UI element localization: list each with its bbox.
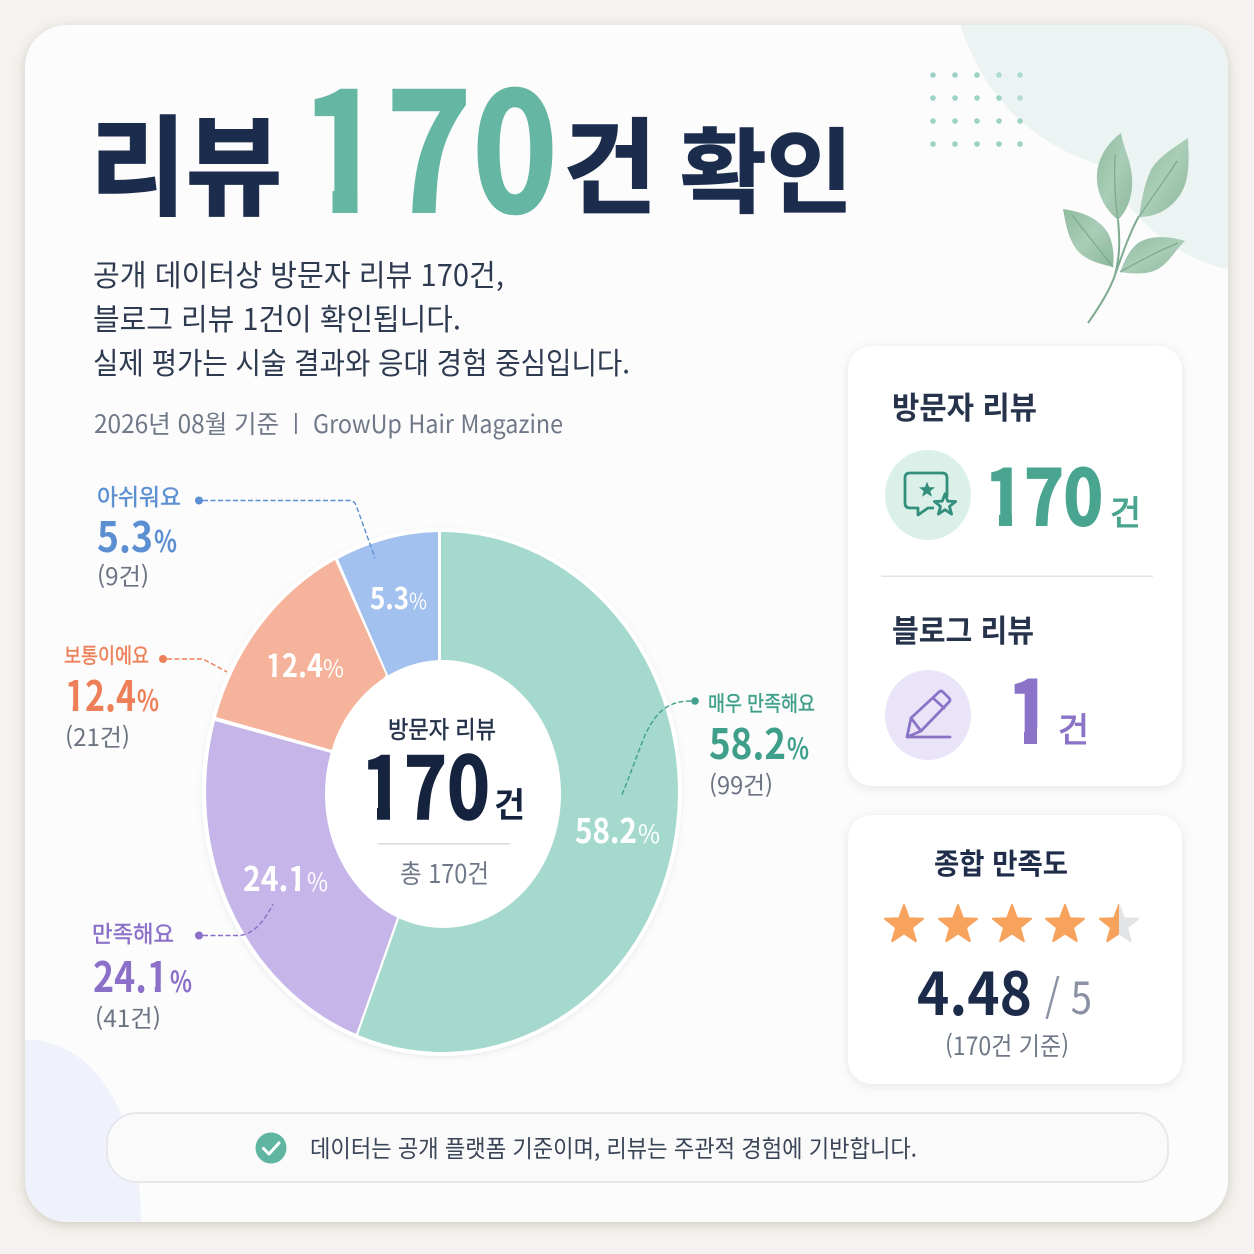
slice: 만족해요 bbox=[206, 721, 398, 1034]
footer note: 데이터는 공개 플랫폼 기준이며, 리뷰는 주관적 경험에 기반합니다. bbox=[310, 1129, 917, 1164]
heading: 종합 만족도: 종합 만족도 bbox=[934, 841, 1068, 883]
slice labels: 24.1 bbox=[243, 852, 306, 901]
slice labels bbox=[243, 574, 660, 901]
callout: 보통이에요 bbox=[64, 640, 227, 753]
callout: 보통이에요: (21건) bbox=[65, 718, 130, 753]
donut center text: 건 bbox=[494, 778, 525, 827]
callout: 아쉬워요 bbox=[97, 478, 375, 592]
decorative blob: top right bbox=[959, 20, 1232, 270]
intro text bbox=[93, 251, 630, 383]
decorative blob: bottom left bbox=[20, 1040, 141, 1226]
callout: 아쉬워요: % bbox=[154, 517, 177, 561]
heading: 블로그 리뷰: 블로그 리뷰 bbox=[892, 606, 1034, 651]
intro text: 공개 데이터상 방문자 리뷰 170건, bbox=[93, 251, 504, 295]
slice labels: % bbox=[323, 649, 344, 684]
footer note bbox=[107, 1113, 1168, 1182]
slice labels: % bbox=[307, 863, 328, 899]
score: / 5 bbox=[1045, 963, 1092, 1027]
panel: overall satisfaction bbox=[848, 815, 1182, 1084]
slice labels: 58.2 bbox=[575, 804, 637, 853]
panel: review counts bbox=[848, 346, 1182, 786]
callout: 매우 만족해요: (99건) bbox=[709, 766, 773, 801]
slice: 아쉬워요 bbox=[338, 532, 438, 675]
callout: 만족해요: 만족해요 bbox=[92, 915, 174, 949]
slice labels: 12.4 bbox=[266, 641, 323, 687]
heading: 방문자 리뷰: 방문자 리뷰 bbox=[892, 383, 1037, 428]
callout: 아쉬워요: 아쉬워요 bbox=[97, 478, 181, 512]
donut center text: 170 bbox=[361, 719, 490, 844]
callout: 보통이에요: 12.4 bbox=[65, 663, 136, 724]
donut center text bbox=[368, 718, 522, 885]
value: 170건: 건 bbox=[1110, 486, 1141, 535]
icon: check bbox=[256, 1132, 286, 1164]
callout: 매우 만족해요: % bbox=[787, 726, 809, 768]
callout: 보통이에요: 보통이에요 bbox=[64, 640, 149, 670]
callout: 만족해요: % bbox=[170, 959, 192, 1001]
callout: 만족해요: (41건) bbox=[95, 999, 161, 1034]
callout: 아쉬워요: (9건) bbox=[97, 557, 149, 592]
score: 4.48 bbox=[917, 947, 1032, 1032]
title: 건 bbox=[563, 84, 657, 235]
slice labels: 5.3 bbox=[370, 574, 409, 618]
slice: 보통이에요 bbox=[216, 560, 386, 750]
value: 1건 bbox=[1014, 678, 1086, 744]
source line: 2026년 08월 기준 bbox=[94, 405, 279, 441]
intro text: 블로그 리뷰 1건이 확인됩니다. bbox=[93, 295, 461, 339]
donut chart bbox=[202, 528, 682, 1056]
slice: 매우 만족해요 bbox=[358, 532, 678, 1052]
donut center text: 총 170건 bbox=[400, 854, 489, 891]
callout: 만족해요 bbox=[92, 904, 273, 1034]
slice labels: % bbox=[638, 815, 660, 851]
title: 170 bbox=[300, 21, 558, 260]
dot grid bbox=[930, 72, 1023, 147]
icon: leaf branch bbox=[1063, 133, 1189, 323]
value: 170건: 170 bbox=[985, 437, 1103, 547]
callout: 만족해요: 24.1 bbox=[93, 944, 168, 1005]
callout: 매우 만족해요 bbox=[621, 688, 815, 801]
callout: 매우 만족해요: 매우 만족해요 bbox=[708, 688, 815, 718]
icon: chat with stars bbox=[885, 450, 971, 540]
source line bbox=[94, 405, 563, 441]
title: 리뷰 bbox=[90, 82, 282, 238]
icon: pencil bbox=[885, 670, 971, 760]
value: 1건: 1 bbox=[1008, 643, 1052, 768]
donut center text: 방문자 리뷰 bbox=[388, 710, 496, 745]
score basis: (170건 기준) bbox=[945, 1027, 1069, 1063]
value: 1건: 건 bbox=[1058, 703, 1089, 752]
rating stars bbox=[885, 905, 1138, 941]
title: 확인 bbox=[680, 99, 853, 232]
donut base ring bbox=[202, 528, 682, 1056]
callout: 아쉬워요: 5.3 bbox=[97, 504, 153, 565]
donut hole bbox=[325, 660, 561, 928]
intro text: 실제 평가는 시술 결과와 응대 경험 중심입니다. bbox=[93, 339, 630, 383]
title bbox=[98, 86, 846, 217]
callout: 매우 만족해요: 58.2 bbox=[709, 711, 786, 772]
value: 170건 bbox=[991, 466, 1138, 528]
source line: GrowUp Hair Magazine bbox=[313, 405, 563, 441]
callout: 보통이에요: % bbox=[137, 678, 159, 720]
slice labels: % bbox=[409, 584, 427, 616]
